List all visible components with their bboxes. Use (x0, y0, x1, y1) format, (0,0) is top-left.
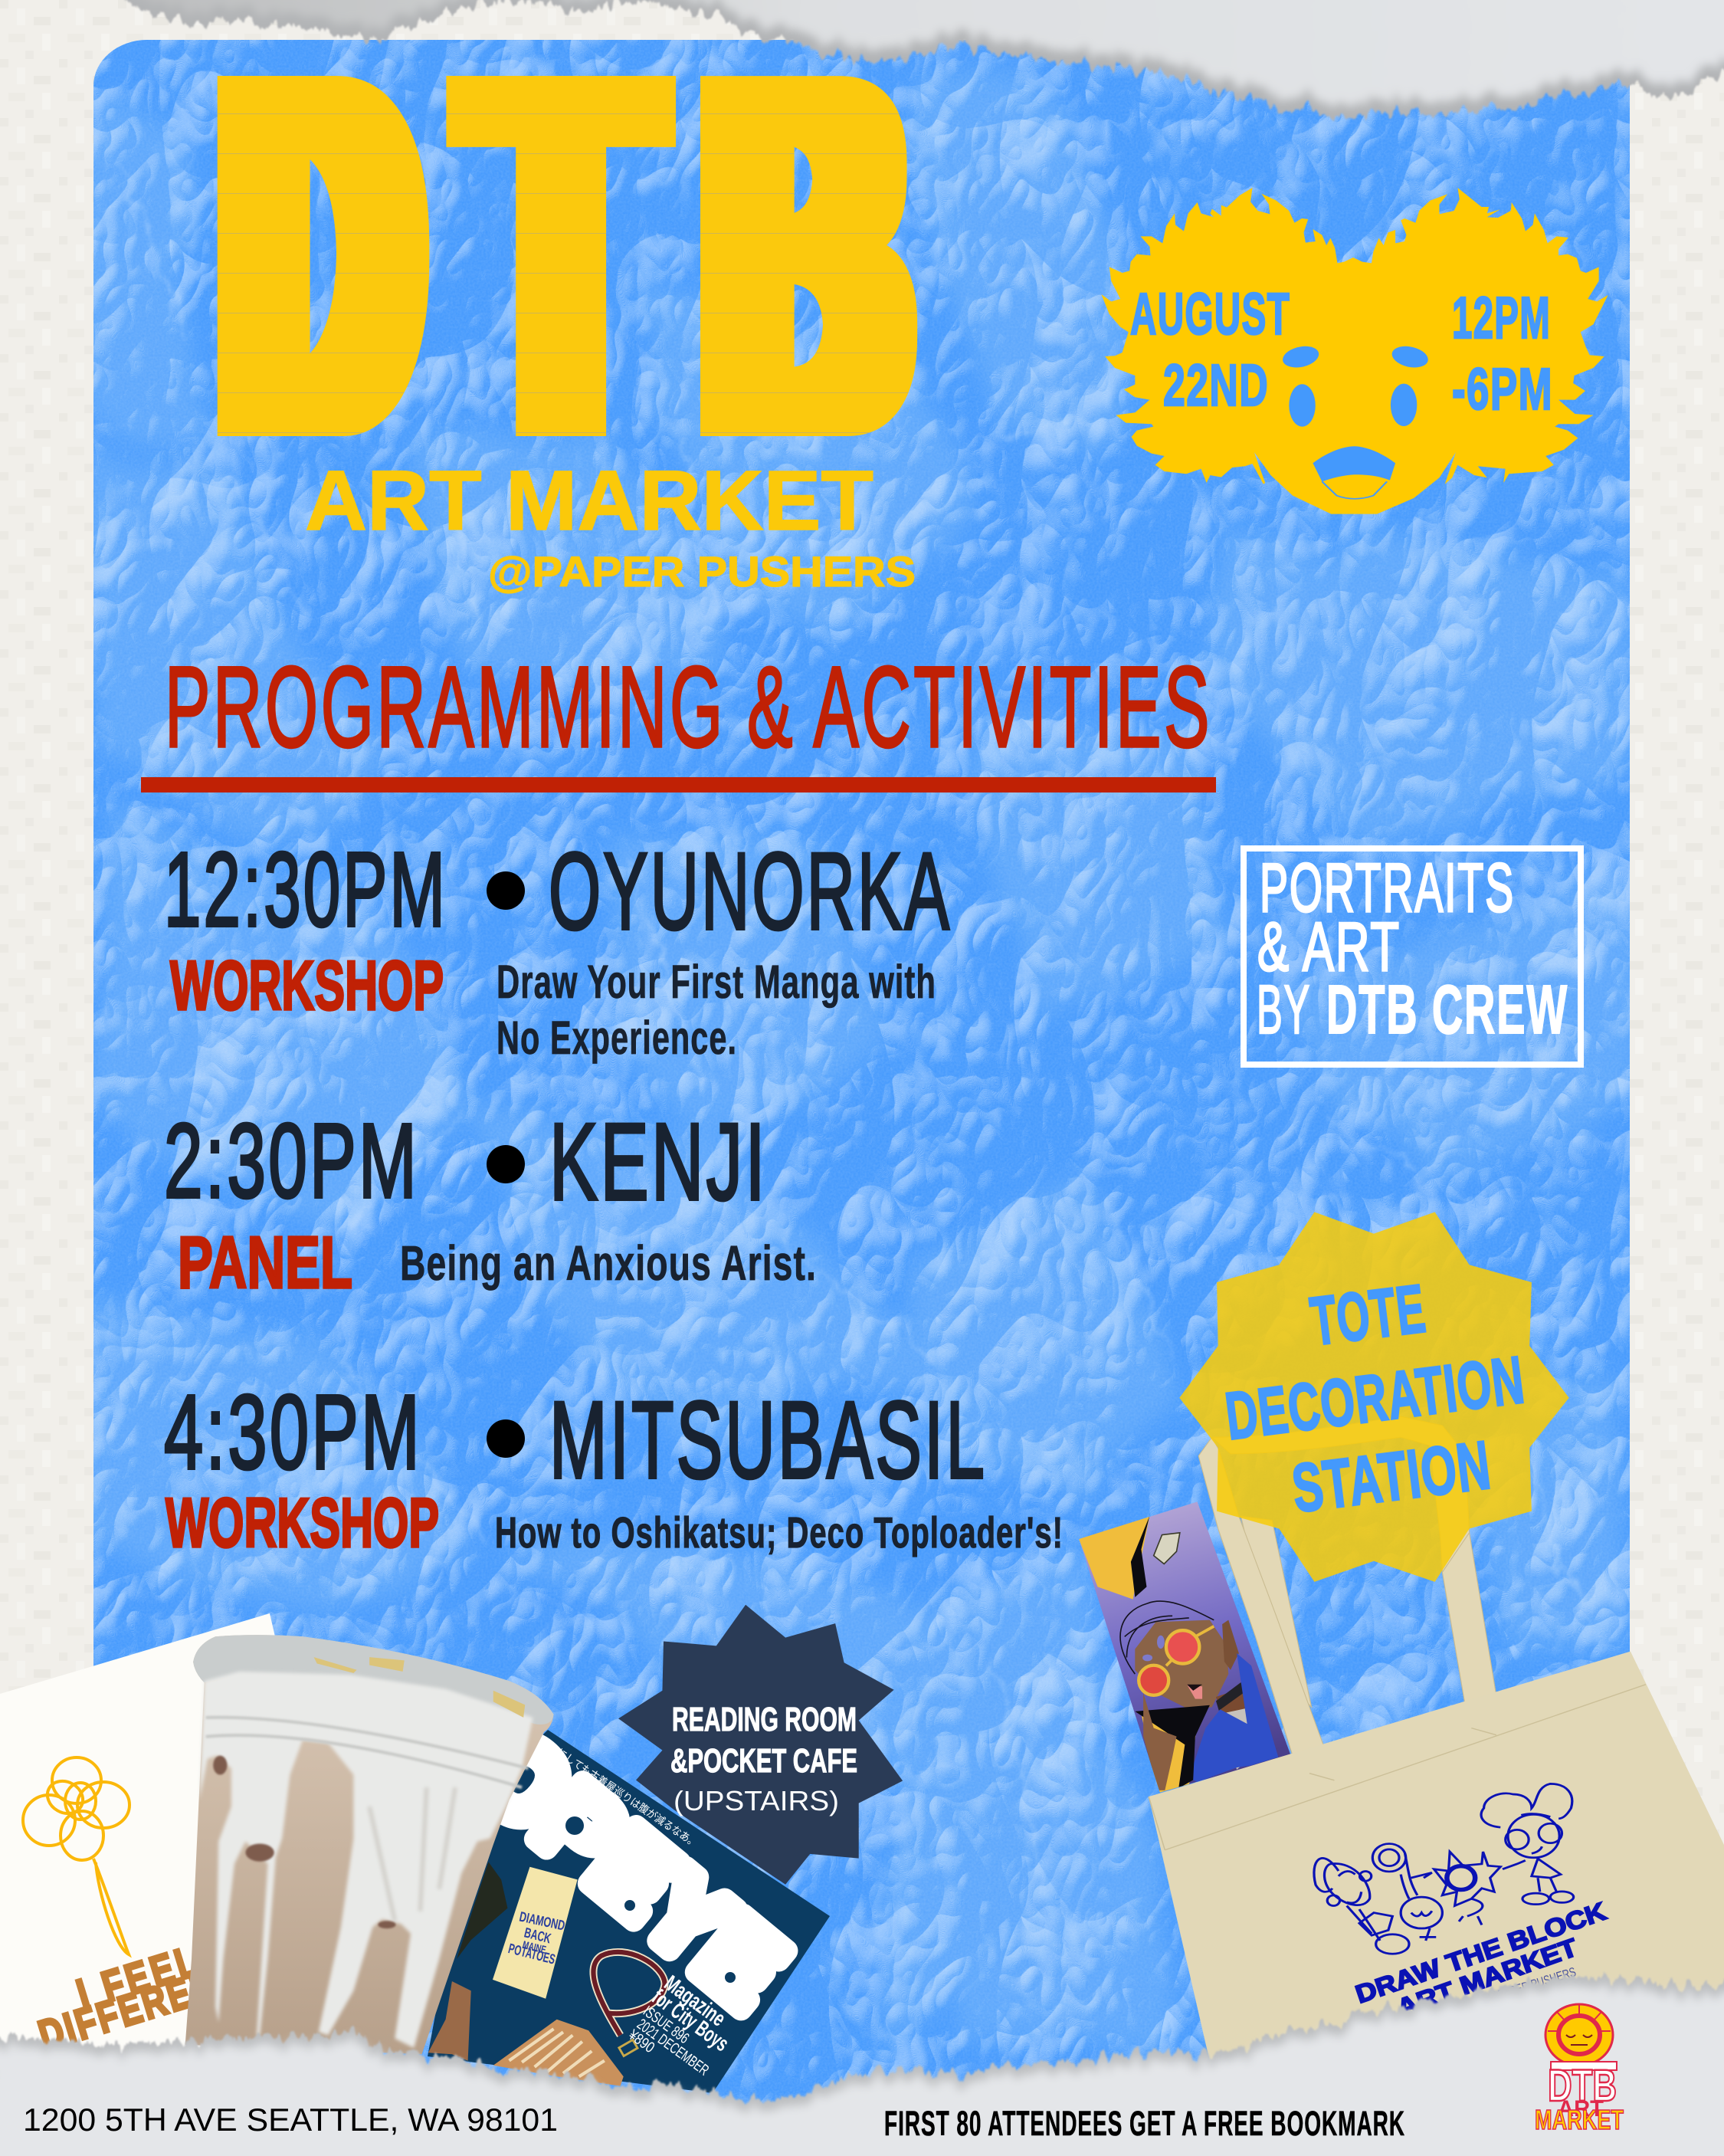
magazine: potato label: DIAMOND (518, 1908, 566, 1934)
magazine: belt (593, 1952, 665, 2056)
badge: reading room and pocket cafe: (UPSTAIRS) (674, 1785, 839, 1816)
schedule: mitsubasil: WORKSHOP (166, 1485, 439, 1562)
tote handle: left back strip (1241, 1516, 1312, 1708)
iced latte cup (185, 1635, 554, 2054)
schedule: oyunorka: No Experience. (497, 1012, 737, 1064)
icon: open mouth (1313, 446, 1395, 499)
schedule: kenji (164, 1101, 817, 1304)
icon: hair and face silhouette (1101, 188, 1608, 514)
schedule: oyunorka: WORKSHOP (170, 947, 444, 1025)
icon: yellow flower (23, 1757, 129, 1954)
text: date: 22ND (1163, 353, 1269, 418)
tote print: art market: ART MARKET (1393, 1933, 1581, 2023)
schedule: oyunorka: 12:30PM (164, 831, 447, 949)
badge: tote decoration station: TOTE (1306, 1269, 1430, 1360)
schedule: mitsubasil: How to Oshikatsu; Deco Toploader's! (495, 1508, 1064, 1557)
subtitle: art market: ART MARKET (305, 454, 873, 548)
badge: face with date and time (1101, 188, 1608, 514)
logo: DTB art market: MARKET (1535, 2104, 1624, 2135)
badge: tote decoration station (1179, 1212, 1569, 1582)
tote handle: left strip (1198, 1437, 1324, 1756)
text: time: -6PM (1452, 356, 1553, 422)
magazine tagline: る。にしても古着屋巡りは腹が減るなあ。 (538, 1734, 700, 1849)
schedule: kenji: KENJI (549, 1101, 768, 1223)
text: time: 12PM (1452, 285, 1551, 351)
tote handle: right strip (1442, 1533, 1496, 1705)
logo: DTB art market: DTB (1548, 2061, 1617, 2111)
badge: tote decoration station: DECORATION (1221, 1342, 1529, 1454)
tote print: characters (1314, 1784, 1574, 1954)
icon: brows and eyes (1277, 342, 1434, 427)
callout: portraits and art (1244, 848, 1581, 1065)
magazine cover (399, 1663, 830, 2093)
magazine: cover lines: Magazine (660, 1971, 730, 2032)
badge: reading room and pocket cafe (618, 1605, 903, 1885)
magazine masthead: POPEYE (399, 1663, 806, 2030)
callout: portraits and art: & ART (1257, 909, 1401, 986)
bottom torn paper (0, 1976, 1724, 2156)
magazine: potato label: POTATOES (506, 1940, 557, 1967)
text: date (1130, 281, 1290, 418)
tote print: draw the block: DRAW THE BLOCK (1352, 1896, 1610, 2009)
magazine: cover lines (624, 1971, 747, 2079)
bookmark illustration (1079, 1501, 1291, 1794)
card lettering: I FEEL (71, 1935, 206, 2018)
heading underline (141, 777, 1216, 793)
callout: portraits and art: DTB CREW (1326, 972, 1568, 1048)
magazine: cover lines: ¥890 (624, 2026, 657, 2056)
schedule: mitsubasil (164, 1373, 1064, 1562)
magazine masthead counters (565, 1816, 736, 1983)
tote hem line (1149, 1685, 1646, 1850)
schedule: oyunorka: Draw Your First Manga with (497, 956, 936, 1008)
text: bookmark notice: FIRST 80 ATTENDEES GET A FREE BOOKMARK (884, 2104, 1405, 2143)
schedule: mitsubasil: 4:30PM (164, 1373, 422, 1491)
top torn paper (126, 0, 1724, 116)
card lettering: DIFFERENT (33, 1953, 245, 2059)
callout: portraits and art: BY (1257, 972, 1311, 1048)
badge: reading room and pocket cafe: &POCKET CAFE (670, 1742, 857, 1780)
schedule: mitsubasil: MITSUBASIL (549, 1380, 987, 1501)
magazine: jacket (457, 1862, 507, 1959)
callout: portraits and art: PORTRAITS (1260, 850, 1515, 927)
schedule: kenji: 2:30PM (164, 1102, 419, 1220)
subtitle: venue: @PAPER PUSHERS (488, 547, 916, 596)
magazine: cover lines: 2021 DECEMBER (634, 2016, 712, 2079)
logo: DTB art market (1535, 2004, 1624, 2135)
magazine: potato label (493, 1867, 578, 1999)
text: time (1452, 285, 1553, 422)
tote body (1149, 1652, 1724, 2098)
logo: DTB art market: ART (1558, 2096, 1604, 2122)
schedule: kenji: PANEL (178, 1222, 352, 1304)
magazine: striped shirt (493, 2020, 624, 2086)
schedule: oyunorka (164, 831, 952, 1064)
schedule: kenji: Being an Anxious Arist. (400, 1236, 817, 1291)
postcard with flower (0, 1613, 322, 2069)
schedule: oyunorka: OYUNORKA (549, 831, 952, 953)
magazine: cover lines: for City Boys (647, 1985, 733, 2056)
magazine: potato label: BACK (523, 1924, 552, 1946)
tote handle: top loop (1212, 1416, 1470, 1572)
title: DTB (228, 0, 901, 535)
text: date: AUGUST (1130, 281, 1290, 347)
badge: reading room and pocket cafe: READING ROOM (672, 1701, 857, 1738)
text: address: 1200 5TH AVE SEATTLE, WA 98101 (23, 2102, 558, 2138)
tote bag (1149, 1416, 1724, 2098)
tote print: paper pushers: @PAPER PUSHERS (1487, 1964, 1578, 2005)
magazine: potato label: MAINE (521, 1938, 547, 1956)
magazine: cover lines: ® (737, 2007, 747, 2023)
magazine: cover lines: ISSUE 896 (640, 2003, 692, 2047)
magazine: argyle sweater (428, 1981, 471, 2061)
badge: tote decoration station: STATION (1288, 1426, 1495, 1527)
